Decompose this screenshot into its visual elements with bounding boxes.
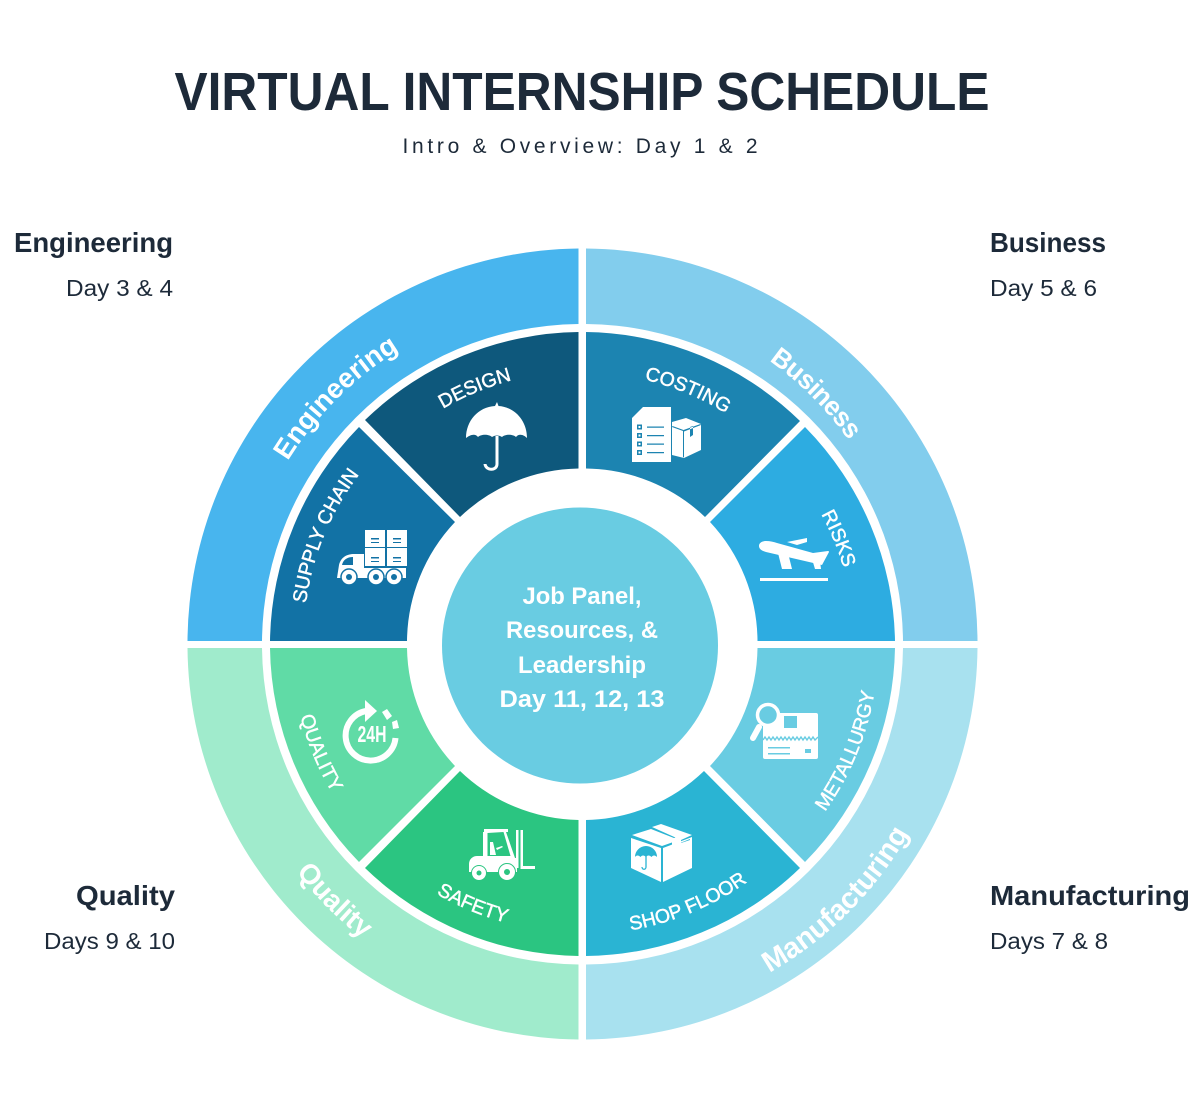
panel: Risks segment: RISKS [822, 509, 856, 566]
panel: Manufacturing outer segment: Manufacturing [760, 827, 911, 972]
icon: delivery truck with boxes [337, 530, 407, 585]
center circle: job panel: Leadership [518, 652, 646, 679]
heading: Engineering days: Engineering [14, 227, 173, 258]
center circle: job panel: Resources, & [506, 617, 658, 644]
panel: Metallurgy segment: METALLURGY [814, 690, 874, 811]
panel: Metallurgy segment [710, 648, 895, 862]
heading: Business days: Business [990, 227, 1106, 258]
panel: Business outer segment [586, 248, 978, 641]
panel: Shop Floor segment [586, 771, 800, 956]
panel: Design segment [365, 332, 578, 517]
heading: Manufacturing days [990, 880, 1190, 954]
heading: Manufacturing days: Manufacturing [990, 880, 1190, 911]
panel: Manufacturing outer segment [586, 648, 978, 1040]
heading: Quality days [44, 880, 175, 954]
heading: Engineering days [14, 227, 173, 301]
heading: Manufacturing days: Days 7 & 8 [990, 928, 1108, 954]
icon: forklift [469, 829, 535, 880]
heading: Business days [990, 227, 1106, 301]
panel: Supply Chain segment: SUPPLY CHAIN [293, 468, 359, 602]
panel: Costing segment: COSTING [646, 368, 730, 412]
icon: cardboard box [631, 824, 692, 882]
panel: Engineering outer segment: Engineering [272, 338, 398, 460]
panel: Costing segment [586, 332, 800, 517]
title: VIRTUAL INTERNSHIP SCHEDULE [174, 62, 990, 122]
panel: Safety segment: SAFETY [438, 884, 510, 922]
center circle: job panel [442, 508, 718, 784]
heading: Engineering days: Day 3 & 4 [66, 275, 173, 301]
icon: umbrella [466, 402, 527, 471]
panel: Supply Chain segment [270, 427, 455, 641]
subtitle: Intro & Overview: Day 1 & 2 [402, 135, 758, 158]
panel: Shop Floor segment: SHOP FLOOR [630, 872, 748, 930]
panel: Quality outer segment [188, 648, 578, 1040]
panel: Business outer segment: Business [770, 346, 858, 438]
panel: Design segment: DESIGN [438, 368, 510, 408]
icon: airplane taking off [759, 538, 829, 581]
center circle: job panel: Day 11, 12, 13 [500, 686, 664, 713]
panel: Risks segment [710, 427, 895, 641]
heading: Quality days: Quality [76, 880, 175, 911]
icon: checklist and box [632, 407, 701, 462]
icon: parcel under magnifier [753, 704, 818, 759]
panel: Quality outer segment: Quality [300, 864, 372, 938]
panel: Safety segment [365, 771, 578, 956]
icon: 24 hour clock [346, 700, 399, 761]
icon: 24 hour clock: 24H [358, 721, 386, 747]
panel: Quality inner segment [270, 648, 455, 862]
heading: Business days: Day 5 & 6 [990, 275, 1097, 301]
center circle: job panel: Job Panel, [522, 583, 642, 610]
panel: Quality inner segment: QUALITY [299, 714, 344, 788]
panel: Engineering outer segment [188, 248, 578, 641]
heading: Quality days: Days 9 & 10 [44, 928, 175, 954]
